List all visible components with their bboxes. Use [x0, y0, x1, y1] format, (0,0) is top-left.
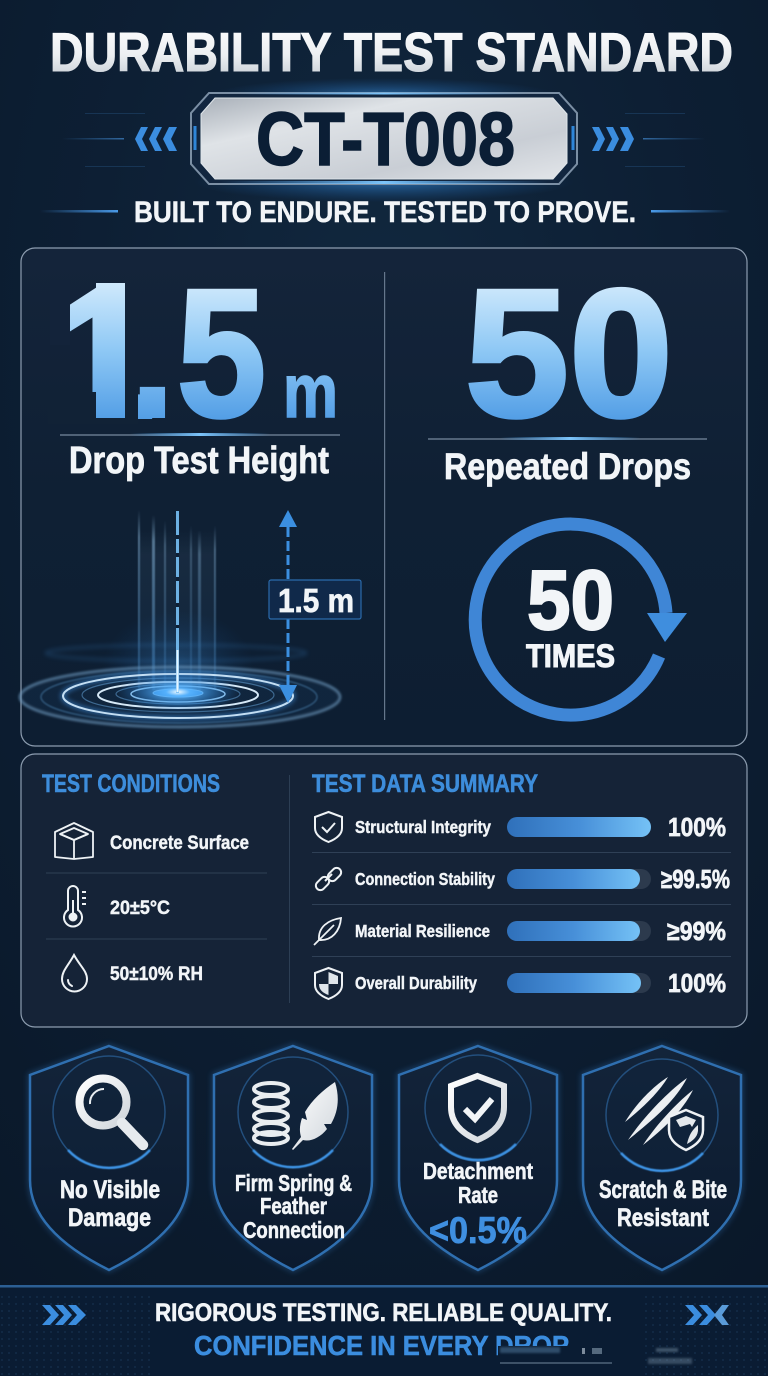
- metric: drop height: 5: [177, 251, 266, 455]
- icon: shield check: [451, 1076, 504, 1140]
- header: [40, 21, 733, 229]
- left footer chevrons: [42, 1305, 86, 1325]
- condition: concrete surface: [46, 823, 267, 874]
- tagline: BUILT TO ENDURE. TESTED TO PROVE.: [134, 196, 636, 229]
- row: connection stability: [312, 864, 731, 905]
- arrow: height dimension: [279, 510, 297, 703]
- foot mask and clean stem for numeral one: [48, 280, 138, 424]
- badge: scratch and bite resistant: [583, 1046, 741, 1270]
- model plate: [191, 78, 577, 202]
- row: connection stability: Connection Stability: [355, 869, 495, 889]
- row: overall durability: [315, 968, 726, 999]
- metric: drop height: m: [283, 349, 338, 434]
- row: material resilience: [312, 916, 731, 957]
- heading: test conditions: TEST CONDITIONS: [42, 770, 220, 798]
- footer band: [0, 1285, 768, 1376]
- right footer chevrons: [685, 1305, 729, 1325]
- row: structural integrity: [312, 812, 731, 853]
- model plate: CT-T008: [256, 97, 515, 181]
- row: material resilience: Material Resilience: [355, 921, 490, 941]
- icon: repeat ring: 50: [527, 553, 614, 647]
- badge: firm spring and feather: Connection: [243, 1217, 345, 1243]
- illustration: impact ripples: [20, 510, 340, 727]
- metric: drop height: Drop Test Height: [69, 440, 329, 482]
- panel: drop test: [20, 248, 747, 746]
- label: 1.5 m: 1.5 m: [278, 582, 354, 619]
- icon: repeat ring: [475, 524, 687, 715]
- metric: repeated drops: [428, 251, 707, 487]
- footer artifact: [498, 1346, 692, 1364]
- row: structural integrity: Structural Integrity: [355, 817, 491, 837]
- icon: thermometer: [64, 886, 86, 926]
- badge: no visible damage: Damage: [68, 1204, 151, 1232]
- icon: shield check: [315, 812, 342, 842]
- footer line one: RIGOROUS TESTING. RELIABLE QUALITY.: [155, 1299, 612, 1327]
- icon: claw scratches: [625, 1077, 693, 1145]
- icon: magnifying glass: [80, 1078, 143, 1145]
- icon: spring: [254, 1083, 288, 1144]
- badge: detachment rate: [399, 1046, 557, 1270]
- condition: temperature: 20±5°C: [110, 898, 170, 919]
- condition: concrete surface: Concrete Surface: [110, 833, 249, 854]
- row: overall durability: 100%: [668, 968, 726, 998]
- row: overall durability: Overall Durability: [355, 973, 477, 993]
- badge: scratch and bite resistant: Resistant: [617, 1204, 710, 1232]
- metric: drop height: 1: [53, 251, 154, 455]
- condition: humidity: [62, 955, 203, 992]
- badge: detachment rate: Detachment: [423, 1158, 533, 1184]
- badge: no visible damage: [30, 1046, 188, 1270]
- panel: conditions and data: [21, 754, 747, 1027]
- icon: cube: [55, 823, 93, 859]
- badge: firm spring and feather: Feather: [260, 1193, 327, 1219]
- badge: detachment rate: Rate: [458, 1182, 498, 1208]
- icon: feather: [292, 1082, 338, 1150]
- badge: no visible damage: No Visible: [60, 1176, 160, 1204]
- badge: scratch and bite resistant: Scratch & Bite: [599, 1176, 727, 1204]
- badge: firm spring and feather: Firm Spring &: [235, 1170, 352, 1196]
- footer line two: CONFIDENCE IN EVERY DROP: [194, 1330, 569, 1361]
- icon: small shield: [669, 1110, 703, 1150]
- left chevrons: [62, 113, 177, 167]
- metric: drop height: .: [131, 251, 174, 455]
- icon: repeat ring: TIMES: [526, 638, 615, 674]
- metric: repeated drops: 50: [465, 251, 673, 455]
- heading: test data summary: TEST DATA SUMMARY: [312, 770, 538, 798]
- row: structural integrity: 100%: [668, 812, 726, 842]
- icon: leaf: [314, 918, 341, 945]
- metric: drop height: [48, 251, 340, 482]
- row: material resilience: ≥99%: [667, 916, 726, 946]
- condition: temperature: [46, 886, 267, 940]
- badge: firm spring and feather: [214, 1046, 372, 1270]
- icon: chain link: [314, 866, 343, 892]
- badge: detachment rate: <0.5%: [429, 1210, 527, 1251]
- row: connection stability: ≥99.5%: [661, 864, 730, 894]
- icon: water drop: [62, 955, 87, 992]
- right chevrons: [592, 113, 705, 167]
- metric: repeated drops: Repeated Drops: [444, 446, 691, 487]
- condition: humidity: 50±10% RH: [110, 964, 203, 985]
- icon: quartered shield: [315, 968, 342, 999]
